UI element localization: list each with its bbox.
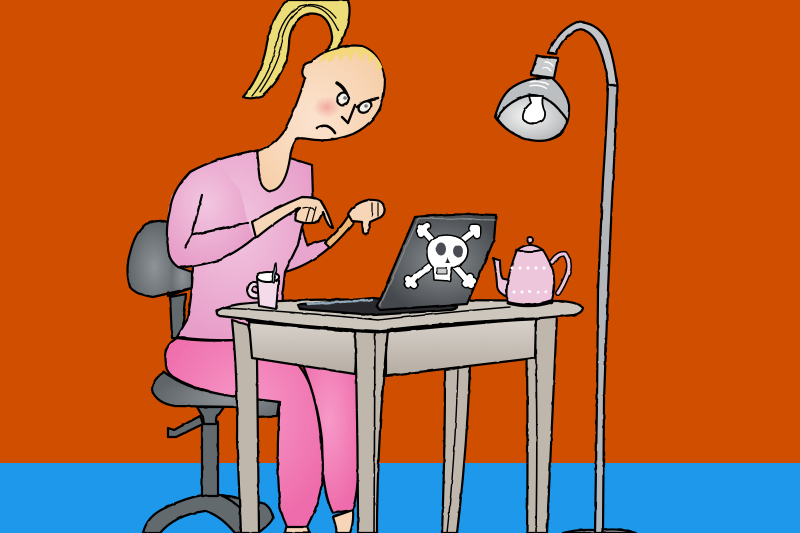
apron right <box>386 318 536 376</box>
skull <box>427 235 468 281</box>
hairline <box>318 47 383 71</box>
laptop <box>298 214 496 315</box>
chair <box>128 221 279 533</box>
ponytail <box>243 0 350 98</box>
near forearm and hand <box>252 197 333 238</box>
pants front leg and hip <box>165 338 323 527</box>
floor lamp <box>495 22 636 533</box>
laptop lid <box>377 214 496 310</box>
blush <box>313 96 341 118</box>
skull and crossbones <box>408 226 477 285</box>
back table legs <box>442 315 557 533</box>
near arm <box>167 160 254 268</box>
spoon <box>272 263 276 283</box>
laptop keyboard base <box>298 298 457 315</box>
table top <box>217 300 583 331</box>
floor <box>0 463 800 533</box>
far arm sleeve <box>285 227 330 272</box>
face: brows, eyes, nose, mouth <box>317 83 378 133</box>
left leg <box>232 320 259 533</box>
coffee mug <box>247 263 279 309</box>
pants rear leg <box>333 510 353 533</box>
crossbones <box>408 226 477 285</box>
head and neck <box>257 46 385 191</box>
sweater torso <box>170 150 313 340</box>
front leg <box>355 328 388 533</box>
far forearm and hand <box>325 200 385 248</box>
woman <box>165 0 385 533</box>
teapot <box>493 237 569 306</box>
table <box>217 300 583 533</box>
feet <box>285 525 310 533</box>
apron left <box>249 322 358 374</box>
